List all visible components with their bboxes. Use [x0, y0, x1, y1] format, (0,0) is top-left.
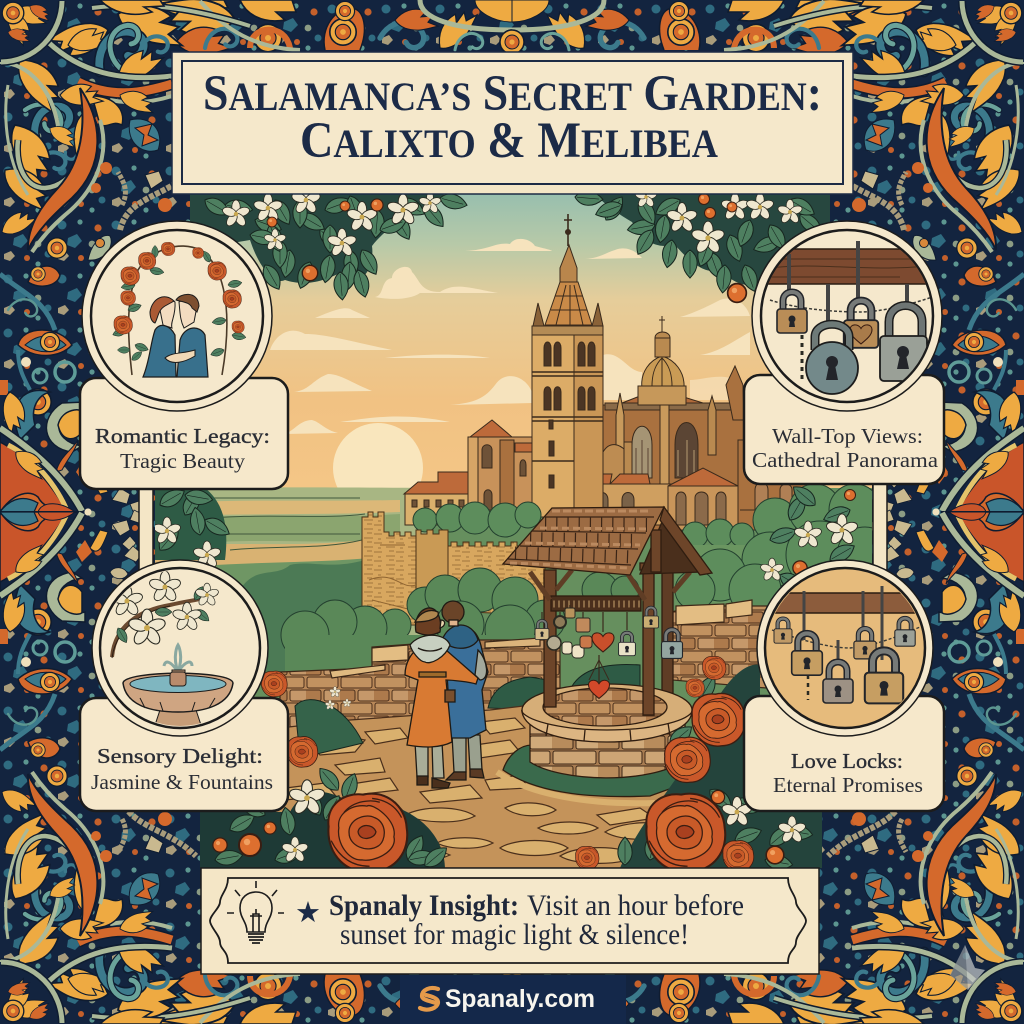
title text: SALAMANCA’S SECRET GARDEN:: [203, 66, 822, 122]
label: Love Locks: Love Locks:: [791, 749, 903, 773]
landscape hills: [155, 487, 430, 680]
insight text: ★: [295, 895, 321, 929]
label: Romantic Legacy: [80, 378, 288, 489]
connector: right panels: [873, 480, 887, 570]
distant trees: [412, 485, 872, 606]
icon: light bulb: [227, 881, 284, 943]
insight text: Visit an hour before: [527, 889, 744, 922]
watermark sparkle: [950, 945, 985, 990]
dome: [642, 356, 684, 388]
insight text: [295, 889, 744, 951]
scene underpainting: [254, 488, 872, 740]
label: Romantic Legacy: Romantic Legacy:: [95, 424, 270, 448]
bell tower: [532, 336, 574, 518]
icon: Spanaly logo: [420, 988, 438, 1010]
label: Sensory Delight: [80, 698, 288, 811]
left chapel: [478, 436, 532, 511]
title banner: [172, 52, 853, 194]
garden bed around the well: [503, 745, 700, 797]
label: Wall-Top Views: [744, 375, 944, 484]
love locks on the well: [535, 605, 682, 698]
title text: [203, 66, 822, 169]
label: Wall-Top Views: Cathedral Panorama: [752, 448, 939, 472]
label: Love Locks: Eternal Promises: [773, 773, 923, 797]
label: Love Locks: [744, 696, 944, 811]
medallion: padlocks on a beam: [750, 221, 942, 411]
insight text: sunset for magic light & silence!: [340, 918, 689, 951]
foliage left of landscape: [155, 490, 230, 567]
top left blossoming branch: [190, 185, 469, 301]
brand footer: Spanaly.com: [445, 985, 595, 1013]
title text: CALIXTO & MELIBEA: [300, 113, 718, 169]
brand footer: [400, 975, 626, 1024]
bottom right planting: [576, 656, 822, 872]
woman: [405, 608, 478, 788]
bottom left planting: [200, 671, 451, 872]
insight text: Spanaly Insight:: [329, 889, 519, 922]
garden scene panel: [152, 185, 893, 872]
garden bushes: [281, 568, 639, 675]
medallion: jasmine and fountain: [92, 560, 268, 736]
clouds: [270, 239, 750, 434]
terrace walls: [280, 600, 790, 728]
castle wall: [362, 512, 545, 625]
shingled roof: [639, 522, 698, 575]
label: Wall-Top Views: Wall-Top Views:: [772, 424, 923, 448]
couple looking at the view: [405, 601, 488, 788]
bushes behind the well: [488, 664, 640, 710]
sky: [238, 194, 872, 488]
top right blossoming branch: [574, 186, 830, 302]
sun: [333, 423, 423, 488]
insight banner: [201, 868, 819, 974]
winch beam: [551, 596, 641, 611]
foliage right of cathedral: [760, 486, 858, 584]
connector: left panels: [139, 485, 153, 570]
lower range: [405, 493, 468, 525]
cathedral: [404, 214, 818, 530]
man: [442, 601, 488, 780]
medallion: love locks on a chain: [757, 560, 933, 736]
label: Romantic Legacy: Tragic Beauty: [120, 449, 246, 473]
label: Sensory Delight: Jasmine & Fountains: [91, 770, 273, 794]
label: Sensory Delight: Sensory Delight:: [97, 744, 263, 768]
medallion: lovers under rose arch: [82, 221, 272, 411]
wishing well: [497, 507, 712, 803]
stone path: [276, 706, 668, 868]
